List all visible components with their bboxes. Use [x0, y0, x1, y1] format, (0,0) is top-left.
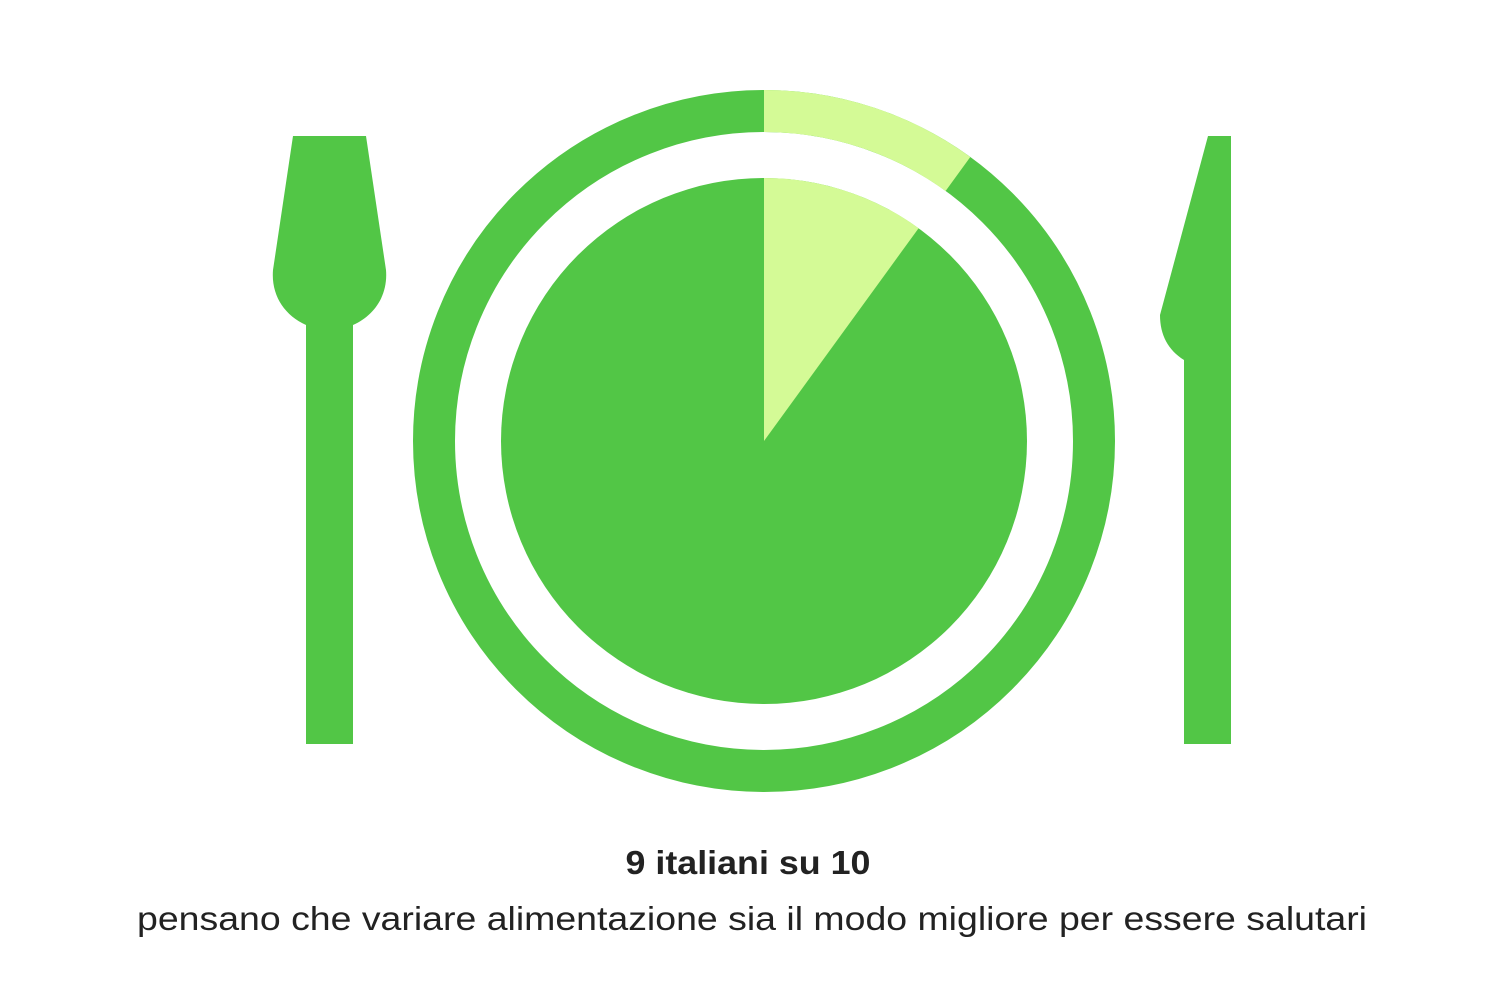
icon: knife	[1160, 136, 1231, 744]
icon: fork	[273, 136, 386, 744]
caption: pensano che variare alimentazione sia il modo migliore per essere salutari	[137, 900, 1367, 937]
plate ring chart	[434, 90, 1094, 771]
pie chart: 9 out of 10	[501, 178, 1027, 704]
headline: 9 italiani su 10	[626, 844, 870, 881]
